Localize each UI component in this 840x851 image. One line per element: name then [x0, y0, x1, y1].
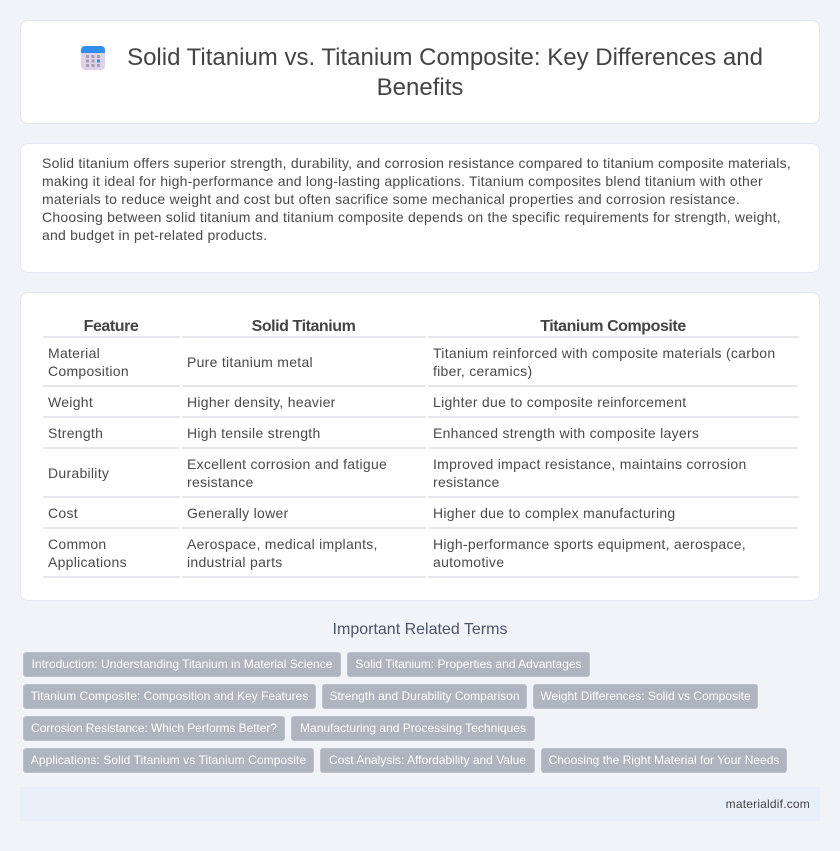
tags: related terms: Introduction: Understanding Titanium in Material Science [32, 657, 332, 671]
row: cost [48, 505, 675, 521]
footer [20, 787, 820, 821]
footer text: source: materialdif.com [726, 797, 810, 811]
tags: related terms: Corrosion Resistance: Which Performs Better? [31, 721, 277, 735]
row: material composition: Composition [48, 363, 129, 379]
row: cost: Cost [48, 505, 78, 521]
row: strength: Enhanced strength with composite layers [433, 425, 699, 441]
tags: related terms: Choosing the Right Material for Your Needs [549, 753, 779, 767]
row: material composition: Material [48, 345, 100, 361]
row: weight: Lighter due to composite reinforcement [433, 394, 686, 410]
tags: related terms: Weight Differences: Solid vs Composite [540, 689, 751, 703]
table header: Titanium Composite [540, 318, 686, 335]
title [127, 44, 763, 101]
row: strength: High tensile strength [187, 425, 321, 441]
row: weight [48, 394, 686, 410]
tags: related terms: Solid Titanium: Properties and Advantages [355, 657, 582, 671]
row: common applications: Applications [48, 554, 127, 570]
row: common applications: automotive [433, 554, 504, 570]
intro paragraph: making it ideal for high-performance and long-lasting applications. Titanium composites blend titanium with other [42, 173, 763, 189]
panel: intro text [20, 143, 820, 273]
tags: related terms [23, 652, 787, 773]
tags: related terms: Applications: Solid Titanium vs Titanium Composite [31, 753, 306, 767]
row: material composition [48, 345, 775, 379]
row: cost: Generally lower [187, 505, 288, 521]
panel: comparison table [20, 292, 820, 601]
title: Solid Titanium vs. Titanium Composite: Key Differences and [127, 44, 763, 71]
row: durability: resistance [433, 474, 500, 490]
row: durability [48, 456, 747, 490]
row: material composition: fiber, ceramics) [433, 363, 532, 379]
row: weight: Higher density, heavier [187, 394, 336, 410]
tags: related terms: Titanium Composite: Composition and Key Features [31, 689, 308, 703]
row: common applications: Aerospace, medical implants, [187, 536, 378, 552]
row: durability: Improved impact resistance, maintains corrosion [433, 456, 747, 472]
row: common applications: Common [48, 536, 106, 552]
intro paragraph: and budget in pet-related products. [42, 227, 267, 243]
title: Benefits [377, 74, 463, 101]
tags: related terms: Strength and Durability Comparison [329, 689, 520, 703]
heading: important related terms: Important Related Terms [333, 621, 507, 638]
row: common applications: industrial parts [187, 554, 283, 570]
table header: Feature [84, 318, 138, 335]
panel: header [20, 20, 820, 124]
row: weight: Weight [48, 394, 93, 410]
row: durability: Durability [48, 465, 109, 481]
row: material composition: Pure titanium metal [187, 354, 313, 370]
row: common applications: High-performance sports equipment, aerospace, [433, 536, 746, 552]
intro paragraph: materials to reduce weight and cost but often sacrifice some mechanical properties and corrosion resistance. [42, 191, 740, 207]
table header [84, 318, 686, 335]
intro paragraph: Choosing between solid titanium and titanium composite depends on the specific requirements for strength, weight, [42, 209, 781, 225]
table header: Solid Titanium [252, 318, 355, 335]
icon: calendar [81, 46, 105, 70]
row: durability: resistance [187, 474, 254, 490]
intro paragraph [42, 155, 791, 243]
row: cost: Higher due to complex manufacturing [433, 505, 675, 521]
row: durability: Excellent corrosion and fatigue [187, 456, 387, 472]
tags: related terms: Manufacturing and Processing Techniques [300, 721, 526, 735]
row: common applications [48, 536, 746, 570]
row: strength [48, 425, 699, 441]
tags: related terms: Cost Analysis: Affordability and Value [329, 753, 526, 767]
row: strength: Strength [48, 425, 103, 441]
intro paragraph: Solid titanium offers superior strength, durability, and corrosion resistance compared to titanium composite materials, [42, 155, 791, 171]
row: material composition: Titanium reinforced with composite materials (carbon [433, 345, 775, 361]
